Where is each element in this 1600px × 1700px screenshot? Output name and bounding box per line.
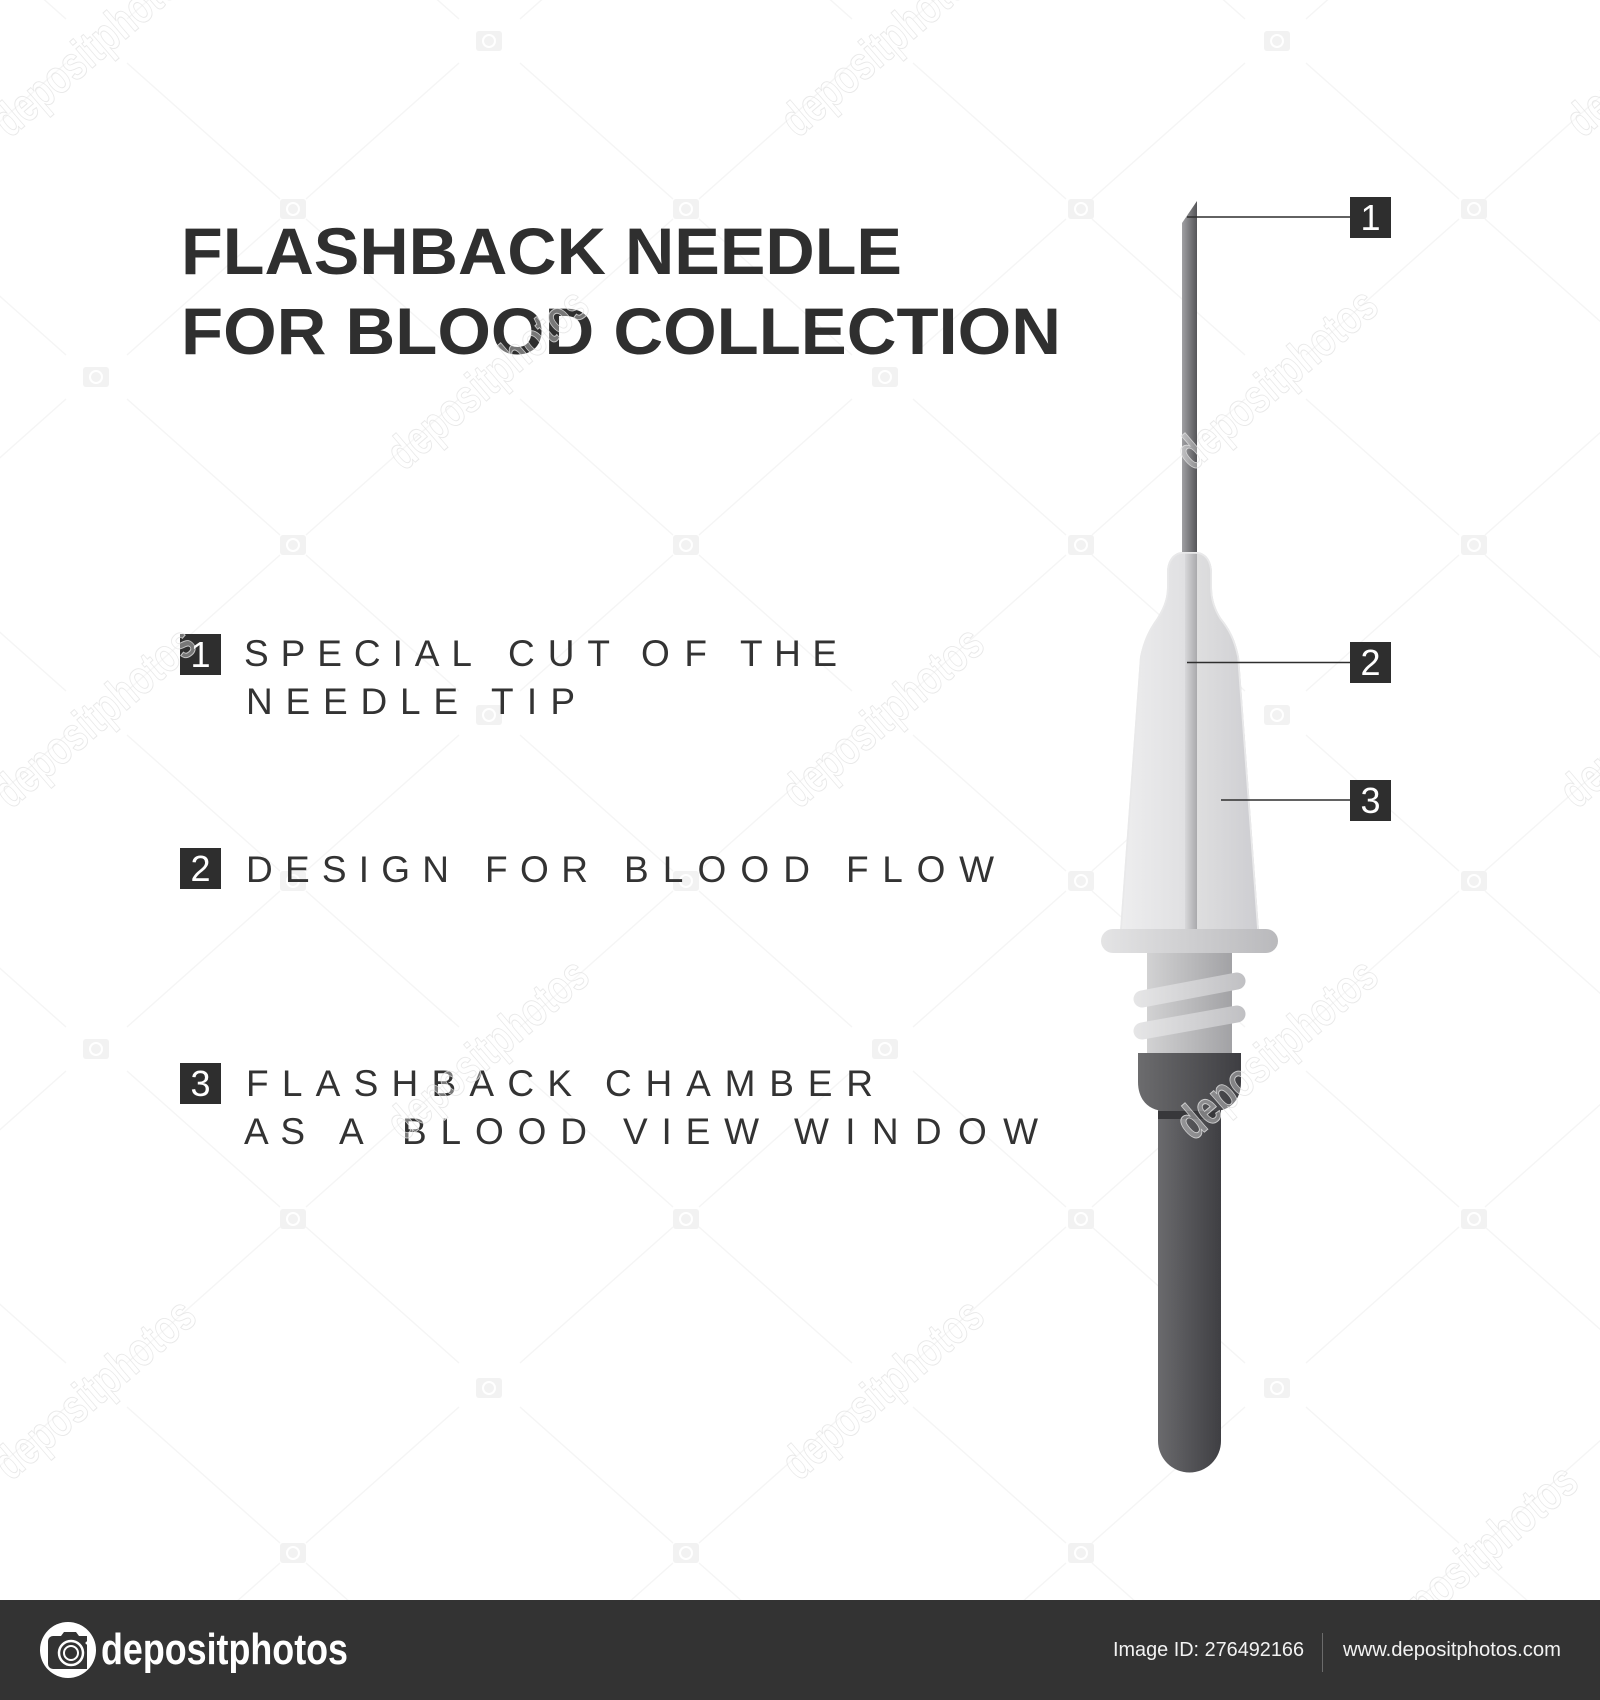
title: FOR BLOOD COLLECTION xyxy=(181,294,1061,368)
badge 3 xyxy=(180,1063,221,1104)
item 3 text: FLASHBACK xyxy=(246,1063,572,1104)
item 3 text xyxy=(244,1063,1038,1152)
item 1 text: NEEDLE xyxy=(246,681,458,722)
watermark wordmarks: depositphotos xyxy=(377,948,599,1150)
badge 2 xyxy=(180,848,221,889)
item 2 text: BLOOD xyxy=(624,849,810,890)
item 3 text: WINDOW xyxy=(794,1111,1038,1152)
thread rings xyxy=(1142,981,1237,1031)
item 1 text: SPECIAL xyxy=(244,633,472,674)
footer bar xyxy=(0,1600,1600,1700)
item 3 text: AS xyxy=(244,1111,305,1152)
dark collar xyxy=(1138,1053,1241,1111)
badge 1: 1 xyxy=(190,634,211,675)
title xyxy=(181,214,1061,368)
image id: Image ID: 276492166 xyxy=(1113,1638,1304,1661)
steel needle shaft with bevelled tip xyxy=(1182,201,1197,552)
item 2 text: FOR xyxy=(485,849,588,890)
threaded core xyxy=(1147,950,1232,1055)
item 3 text: VIEW xyxy=(623,1111,759,1152)
watermark wordmarks: depositphotos xyxy=(772,1288,994,1490)
badge 2: 2 xyxy=(190,848,211,889)
list item 2: design for blood flow xyxy=(180,848,994,890)
badge 3: 3 xyxy=(190,1063,211,1104)
item 2 text: FLOW xyxy=(846,849,994,890)
list item 3: flashback chamber xyxy=(180,1063,1038,1152)
watermark wordmarks: depositphotos xyxy=(1166,278,1388,480)
item 1 text: THE xyxy=(740,633,837,674)
item 3 text: BLOOD xyxy=(402,1111,587,1152)
item 1 text: TIP xyxy=(491,681,575,722)
item 2 text xyxy=(246,849,994,890)
badge 1 xyxy=(180,634,221,675)
callout 3: flashback chamber: 3 xyxy=(1360,780,1381,821)
footer logo icon: camera in circle xyxy=(40,1622,96,1678)
watermark wordmarks: depositphotos xyxy=(772,616,994,818)
collar shadow band xyxy=(1158,1111,1221,1119)
handle tube xyxy=(1158,1105,1221,1472)
item 1 text: CUT xyxy=(508,633,610,674)
watermark wordmarks: depositphotos xyxy=(377,278,599,480)
callout 1: needle tip: 1 xyxy=(1360,197,1381,238)
watermark wordmarks: depositphotos xyxy=(1166,948,1388,1150)
list item 1: special cut xyxy=(180,633,837,722)
website url: www.depositphotos.com xyxy=(1342,1638,1561,1661)
title: FLASHBACK NEEDLE xyxy=(181,214,902,288)
footer logo wordmark: depositphotos xyxy=(101,1625,348,1674)
watermark camera icons xyxy=(83,31,1487,1563)
footer divider xyxy=(1322,1633,1324,1672)
item 3 text: CHAMBER xyxy=(605,1063,873,1104)
item 2 text: DESIGN xyxy=(246,849,449,890)
translucent hub body xyxy=(1120,552,1259,929)
item 3 text: A xyxy=(339,1111,364,1152)
needle illustration xyxy=(1101,201,1278,1472)
callout 2: blood flow design xyxy=(1187,642,1391,683)
hub flange xyxy=(1101,929,1278,953)
item 1 text xyxy=(244,633,837,722)
item 1 text: OF xyxy=(641,633,707,674)
callout 2: blood flow design: 2 xyxy=(1360,642,1381,683)
callout 3: flashback chamber xyxy=(1221,780,1391,821)
callout 1: needle tip xyxy=(1187,197,1391,238)
